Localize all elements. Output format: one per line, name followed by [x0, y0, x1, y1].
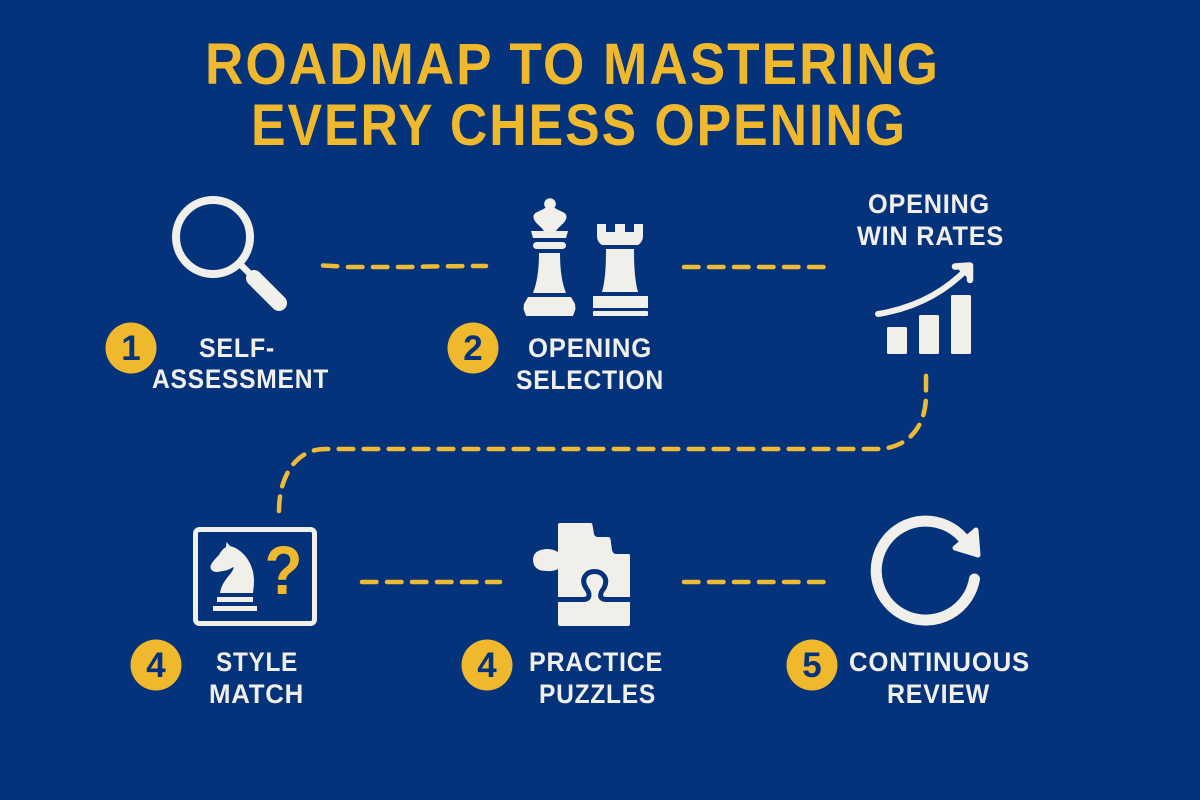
- step 4: label style match: MATCH: [209, 679, 304, 709]
- arrow: dashed connector step 2 to chart: [684, 265, 825, 269]
- step 4: label style match: [209, 647, 304, 709]
- step 4: label practice puzzles: PUZZLES: [539, 679, 656, 709]
- icon: magnifying glass: [176, 200, 279, 303]
- step 1: badge: 1: [121, 329, 141, 368]
- step 1: badge: [106, 322, 156, 374]
- step 4: badge practice: 4: [477, 646, 497, 685]
- arrow: dashed connector chart to style match: [279, 372, 926, 511]
- title: EVERY CHESS OPENING: [251, 93, 907, 158]
- icon: king and rook: [524, 198, 648, 316]
- title: [205, 32, 940, 158]
- icon: bar chart with rising arrow: [878, 266, 971, 354]
- step 5: label: [849, 647, 1030, 709]
- step 4: badge practice: [462, 640, 512, 690]
- heading: opening win rates: [857, 189, 1004, 251]
- step 1: label: ASSESSMENT: [152, 364, 329, 394]
- step 2: label: [516, 333, 664, 395]
- step 4: badge: 4: [146, 646, 166, 685]
- title: ROADMAP TO MASTERING: [205, 32, 940, 97]
- heading: opening win rates: OPENING: [868, 189, 990, 219]
- step 4: label practice puzzles: PRACTICE: [529, 647, 663, 677]
- step 4: label style match: STYLE: [216, 647, 298, 677]
- step 1: label: [152, 333, 329, 394]
- step 2: label: OPENING: [528, 333, 652, 363]
- icon: knight and question mark card: ?: [265, 532, 302, 609]
- icon: knight and question mark card: [196, 530, 314, 624]
- step 4: badge: [130, 640, 182, 690]
- arrow: dashed connector puzzles to review: [684, 580, 825, 584]
- step 2: badge: 2: [463, 329, 483, 368]
- step 4: label practice puzzles: [529, 647, 663, 709]
- step 2: badge: [448, 322, 498, 374]
- icon: circular review arrow: [876, 521, 978, 620]
- step 2: label: SELECTION: [516, 365, 664, 395]
- arrow: dashed connector style match to puzzles: [362, 580, 500, 584]
- icon: puzzle piece: [533, 523, 633, 626]
- step 1: label: SELF-: [199, 333, 275, 363]
- arrow: dashed connector step 1 to 2: [323, 266, 486, 267]
- step 5: badge: [786, 640, 838, 690]
- step 5: badge: 5: [802, 646, 822, 685]
- step 5: label: CONTINUOUS: [849, 647, 1030, 677]
- step 5: label: REVIEW: [887, 679, 990, 709]
- heading: opening win rates: WIN RATES: [857, 221, 1004, 251]
